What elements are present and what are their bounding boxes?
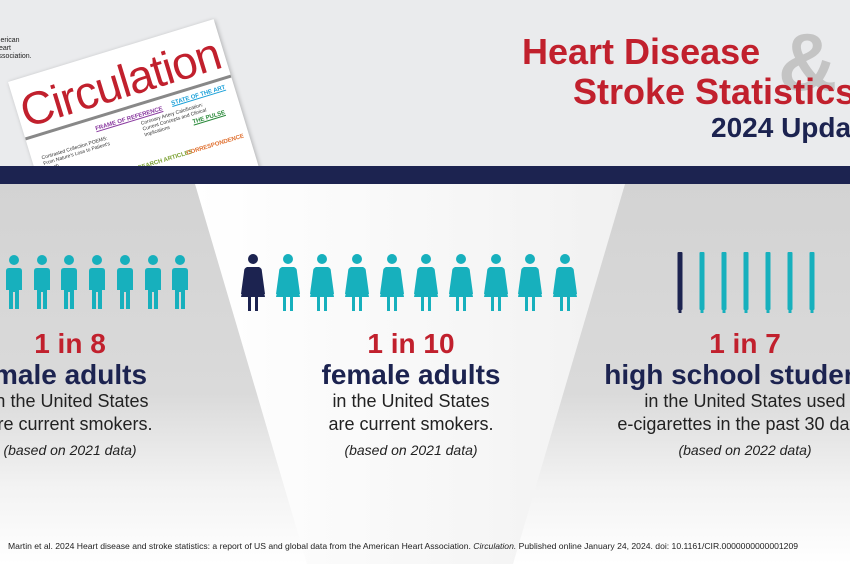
title: & xyxy=(778,17,837,108)
logo text xyxy=(0,36,32,60)
journal cover: CORRESPONDENCE xyxy=(186,134,245,157)
journal cover xyxy=(8,18,262,168)
journal cover: FRAME OF REFERENCE xyxy=(95,106,164,132)
stat: female xyxy=(322,328,500,458)
navy band xyxy=(0,166,850,184)
stat: male xyxy=(0,328,153,458)
icons xyxy=(6,252,814,313)
stat: female: are current smokers. xyxy=(328,414,494,434)
journal cover: Coronary Artery Calcification: Current Concepts and Clinical Implications xyxy=(140,102,207,138)
journal cover: THE PULSE xyxy=(192,110,226,126)
stat: male: (based on 2021 data) xyxy=(3,442,137,458)
stat: male: 1 in 8 xyxy=(34,328,106,359)
stat: students: (based on 2022 data) xyxy=(678,442,812,458)
journal cover: STATE OF THE ART xyxy=(171,85,226,107)
title: Heart Disease xyxy=(522,31,760,72)
stat: students: in the United States used xyxy=(644,391,846,411)
stat: female: 1 in 10 xyxy=(367,328,455,359)
footer citation: Martin et al. 2024 Heart disease and stroke statistics: a report of US and global data from the American Heart Association. Circulation. Published online January 24, 2024. doi: 10.1161/CIR.0000000000001209 xyxy=(8,541,798,551)
stat: female: (based on 2021 data) xyxy=(344,442,478,458)
stat: female: female adults xyxy=(322,359,500,390)
stat: students: 1 in 7 xyxy=(709,328,781,359)
journal cover: Circulation xyxy=(14,27,226,137)
title: Stroke Statistics xyxy=(573,71,850,112)
stat: students xyxy=(604,328,850,458)
stat: female: in the United States xyxy=(332,391,490,411)
title xyxy=(522,17,850,143)
